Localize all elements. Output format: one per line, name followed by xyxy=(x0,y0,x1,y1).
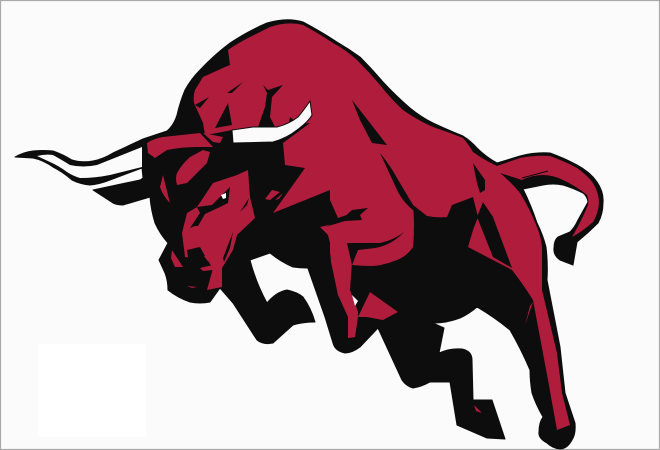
knee gap xyxy=(352,295,358,306)
leg red restoration xyxy=(330,243,358,338)
left horn xyxy=(37,147,142,178)
red body, neck, tail and legs xyxy=(194,23,599,430)
neck marks xyxy=(265,190,283,200)
blank white patch xyxy=(38,344,146,437)
hind leg streak xyxy=(525,302,533,325)
hoof accent xyxy=(474,405,482,413)
right horn xyxy=(232,101,312,143)
forehead patches xyxy=(147,133,223,203)
face xyxy=(182,170,255,290)
face details xyxy=(187,187,249,270)
nostril and lip xyxy=(171,250,213,288)
shoulder and flank creases xyxy=(195,82,512,268)
tail highlight xyxy=(522,171,548,178)
horn slit xyxy=(95,177,141,187)
eye xyxy=(221,193,226,199)
